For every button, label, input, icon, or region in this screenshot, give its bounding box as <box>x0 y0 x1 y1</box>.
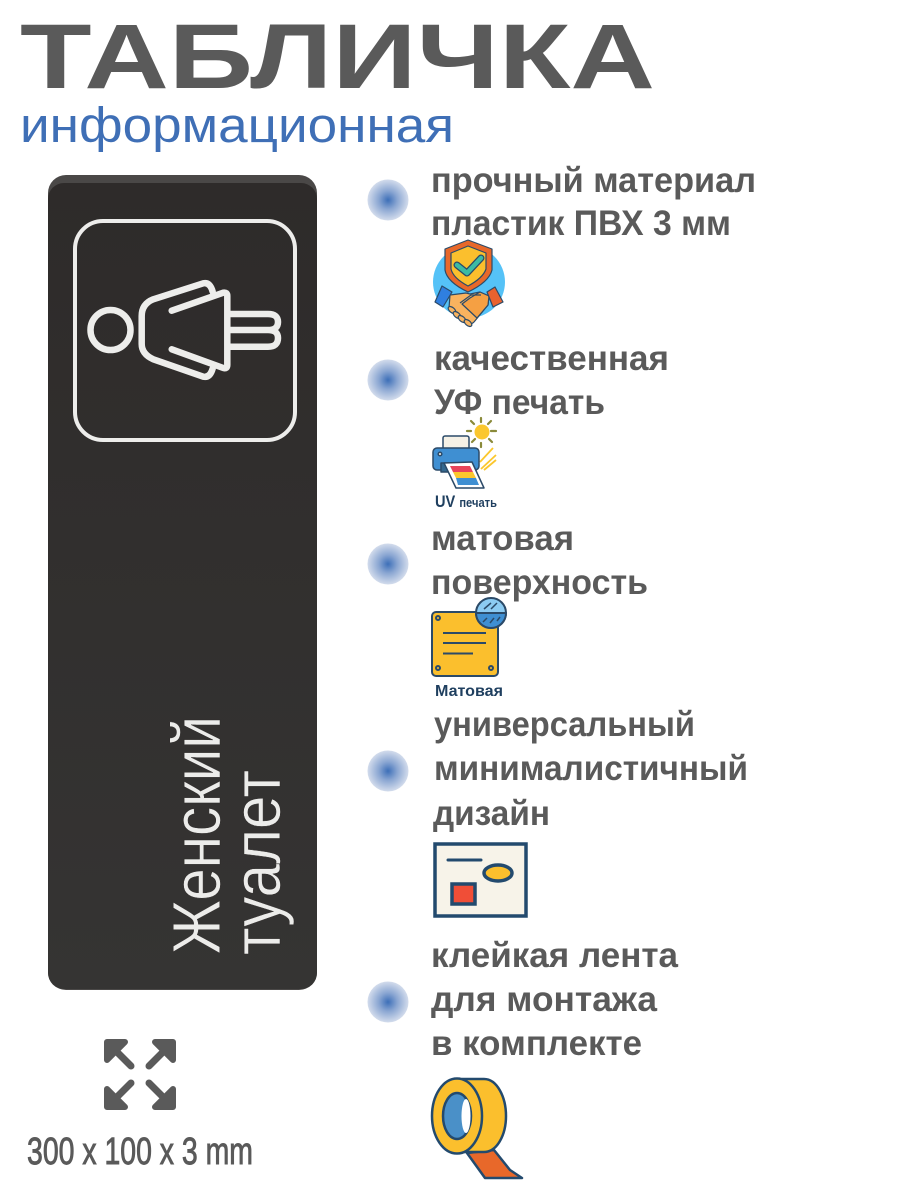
dimensions: 300 x 100 x 3 mm <box>27 1131 253 1173</box>
feature: design: минималистичный <box>434 749 748 788</box>
feature: UV print: УФ печать <box>434 383 605 422</box>
feature: design <box>368 705 748 916</box>
sign text <box>159 716 295 955</box>
icon: adhesive tape <box>432 1078 522 1178</box>
feature: matte <box>368 519 648 700</box>
icon: frame with person <box>75 221 295 440</box>
sign text: Женский <box>159 716 235 954</box>
icon: UV printer <box>433 418 496 488</box>
panel: sign plate <box>48 175 317 990</box>
feature: matte: матовая <box>431 519 574 558</box>
icon: four arrows <box>107 1042 173 1107</box>
feature: material: пластик ПВХ 3 мм <box>431 204 731 243</box>
feature: tape: в комплекте <box>431 1024 642 1063</box>
icon caption: UV печать <box>435 492 497 511</box>
feature: UV print <box>368 339 669 511</box>
icon caption: Матовая <box>435 683 503 700</box>
feature: design: дизайн <box>433 794 550 833</box>
icon: shield and handshake <box>433 240 505 328</box>
feature: UV print: качественная <box>434 339 669 378</box>
feature: design: универсальный <box>434 705 695 744</box>
feature: material: прочный материал <box>431 161 756 200</box>
feature: material <box>368 161 756 328</box>
feature: tape <box>368 936 679 1178</box>
icon: minimal design <box>435 844 526 916</box>
feature: matte: поверхность <box>431 563 648 602</box>
subtitle: информационная <box>20 99 454 153</box>
icon: matte surface <box>432 598 506 676</box>
feature: tape: для монтажа <box>431 980 658 1019</box>
sign text: туалет <box>219 770 295 955</box>
title: ТАБЛИЧКА <box>20 6 655 108</box>
feature: tape: клейкая лента <box>431 936 679 975</box>
